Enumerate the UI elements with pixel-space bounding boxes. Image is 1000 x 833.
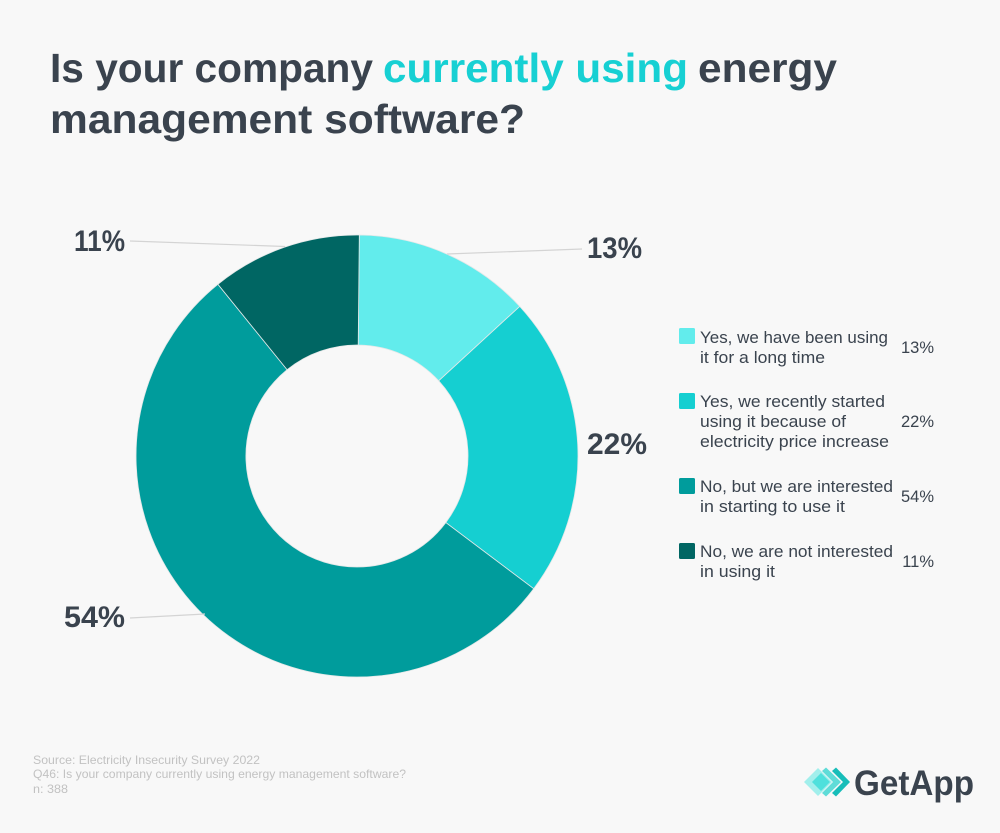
donut chart [136,235,578,677]
title: Is your company [50,45,373,91]
leader lines [130,241,582,618]
source note: n: 388 [33,782,68,796]
donut value labels: 22% [587,428,647,461]
legend item: interested: in starting to use it [700,498,845,516]
segment: 54% interested [136,284,534,677]
legend item: recently started [679,393,934,451]
legend item: interested [679,478,934,516]
legend item: not interested: 11% [902,553,934,571]
legend item: long time: it for a long time [700,349,825,367]
donut value labels: 54% [64,601,125,634]
legend item: recently started: electricity price increase [700,433,889,451]
source note: Q46: Is your company currently using energy management software? [33,767,406,781]
segment: 22% recently started [439,306,578,589]
legend item: not interested: No, we are not interested [700,543,893,561]
icon: logo diamonds [804,768,850,796]
title: currently using [383,45,688,91]
legend item: long time [679,328,934,367]
segment: 13% long-time users [358,235,520,381]
legend item: recently started: using it because of [700,413,846,431]
title [50,45,837,142]
title: management software? [50,96,525,142]
donut value labels: 13% [587,232,642,265]
legend item: long time: Yes, we have been using [700,329,888,347]
legend item: not interested: in using it [700,563,775,581]
legend item: not interested [679,543,934,581]
legend item: recently started: 22% [901,413,934,431]
logo wordmark: GetApp [854,764,974,803]
legend [679,328,934,581]
legend item: interested: 54% [901,488,934,506]
segment: 11% not interested [218,235,359,370]
donut value labels: 11% [74,225,125,258]
legend item: long time: 13% [901,339,934,357]
source note [33,753,406,796]
donut value labels [64,225,647,634]
title: energy [698,45,837,91]
source note: Source: Electricity Insecurity Survey 2022 [33,753,260,767]
legend item: interested: No, but we are interested [700,478,893,496]
GetApp logo [804,764,974,803]
legend item: recently started: Yes, we recently started [700,393,885,411]
